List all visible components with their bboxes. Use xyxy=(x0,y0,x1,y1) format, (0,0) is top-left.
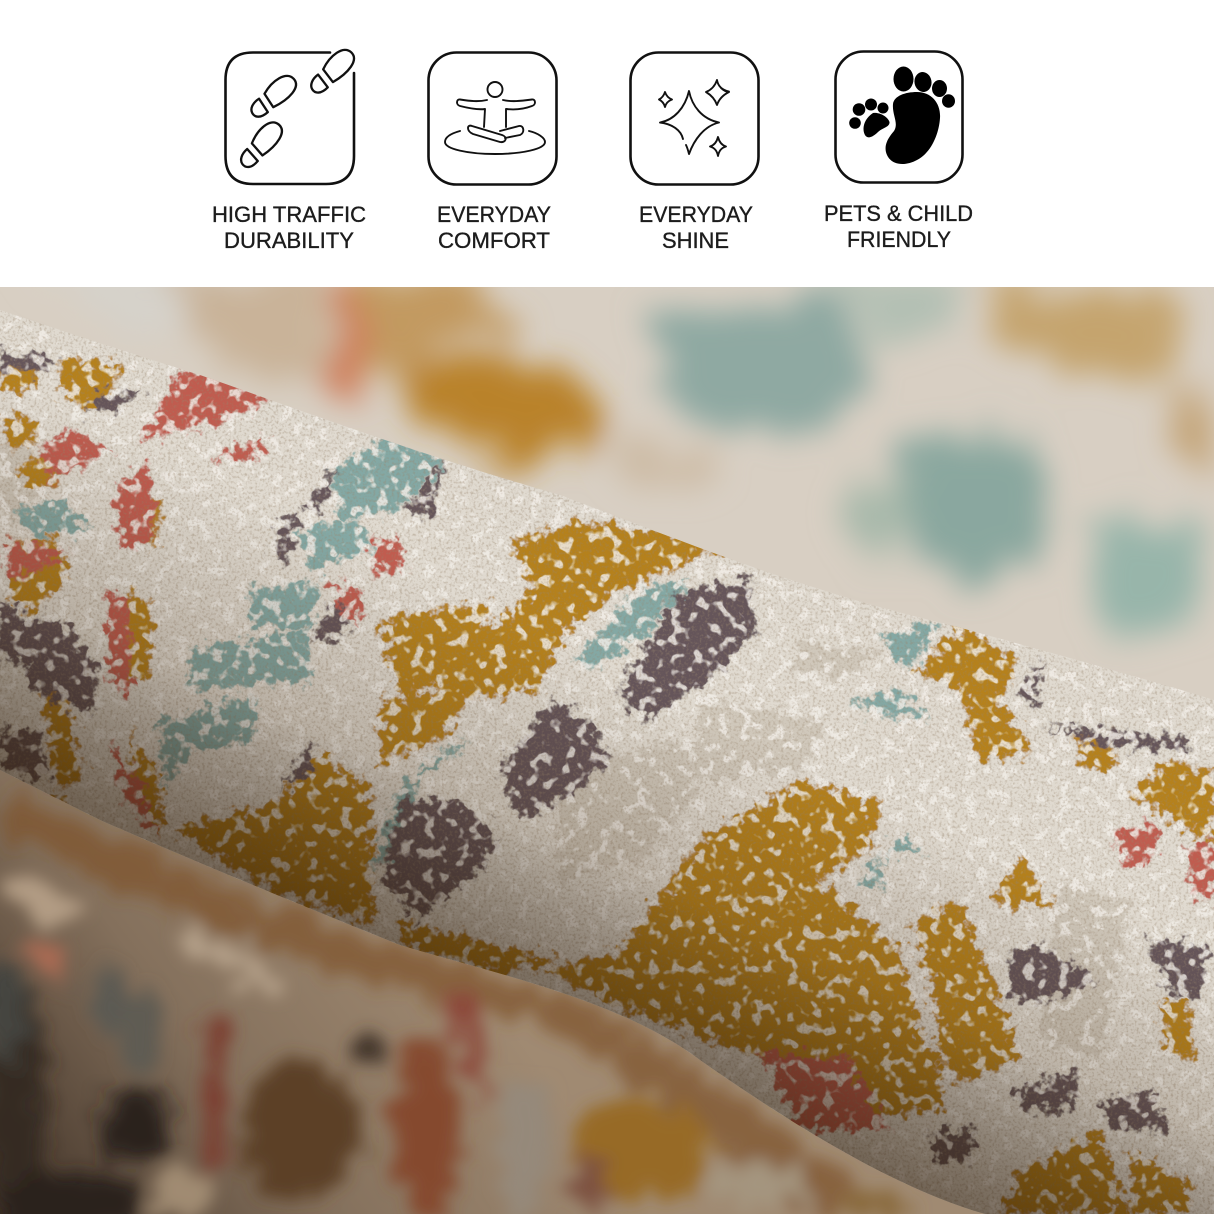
rug pattern: soft tan mottling xyxy=(0,420,1130,1060)
label: high traffic durability: HIGH TRAFFIC xyxy=(212,202,366,227)
label: pets and child friendly: PETS & CHILD xyxy=(824,201,973,226)
rug texture: cream speckle xyxy=(0,287,1214,1214)
rug shading at lower right xyxy=(0,412,1214,1214)
icon: high traffic durability footprints xyxy=(226,45,359,184)
label: everyday shine: SHINE xyxy=(662,228,729,253)
background: white header xyxy=(0,0,1214,287)
label: high traffic durability: DURABILITY xyxy=(224,228,354,253)
label: everyday shine: EVERYDAY xyxy=(639,202,753,227)
icon: everyday shine sparkles xyxy=(630,52,758,184)
rug pattern: gold patches xyxy=(0,355,1214,1214)
rug pattern: brown patches xyxy=(0,350,1210,1165)
icon: pets and child friendly footprints xyxy=(836,52,962,182)
rug pattern: teal patches xyxy=(15,435,940,890)
rug shading toward the fold xyxy=(0,618,1214,1214)
label: everyday comfort: COMFORT xyxy=(438,228,550,253)
rolled rug body with pattern xyxy=(0,280,1214,1214)
photo: close-up of rolled rug xyxy=(0,260,1214,1214)
photo background: blurred rug behind the roll xyxy=(0,287,1214,700)
icon: everyday comfort meditating figure xyxy=(428,52,556,184)
rug pattern: red patches xyxy=(0,370,1214,1130)
photo foreground: blurred lower rug fold xyxy=(0,770,985,1214)
label: pets and child friendly: FRIENDLY xyxy=(847,227,951,252)
rug texture: pile grain xyxy=(0,287,1214,1214)
label: everyday comfort: EVERYDAY xyxy=(437,202,551,227)
